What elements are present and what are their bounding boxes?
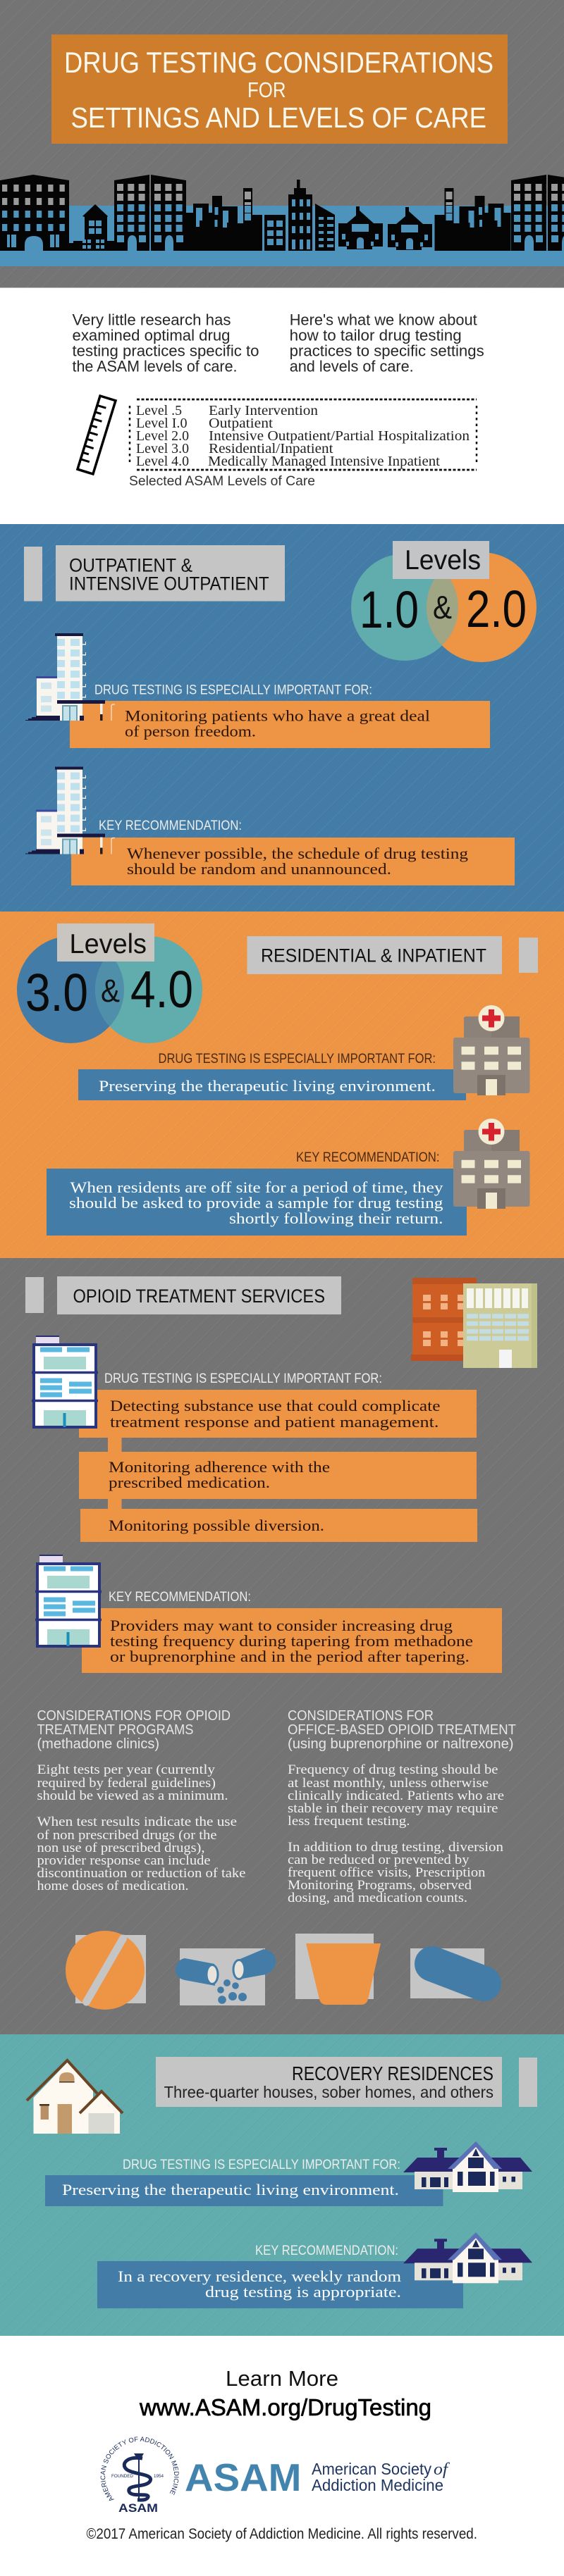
levels of care table: Intensive Outpatient/Partial Hospitalization [209, 429, 470, 444]
callout: key recommendation: In a recovery residence, weekly random [118, 2267, 402, 2285]
intro text left: examined optimal drug [72, 327, 230, 344]
levels venn 3.0 and 4.0: 4.0 [130, 960, 193, 1019]
levels of care table: Medically Managed Intensive Inpatient [208, 454, 441, 469]
callout: key recommendation: drug testing is appropriate. [205, 2283, 401, 2301]
header panel [0, 0, 564, 287]
levels venn 1.0 and 2.0: & [433, 589, 452, 626]
levels venn 1.0 and 2.0 [351, 541, 537, 662]
heading: residential: RESIDENTIAL & INPATIENT [261, 945, 486, 966]
levels of care table: Early Intervention [209, 404, 318, 418]
text block: office-based opioid treatment: In addition to drug testing, diversion [288, 1840, 504, 1855]
callout: drug testing important: Monitoring possible diversion. [109, 1517, 324, 1534]
text block: opioid treatment programs: should be viewed as a minimum. [37, 1788, 228, 1803]
callout: key recommendation: KEY RECOMMENDATION: [109, 1590, 251, 1605]
text block: opioid treatment programs: CONSIDERATIONS FOR OPIOID [37, 1707, 231, 1724]
icon: ASAM seal: AMERICAN SOCIETY OF ADDICTION MEDICINE [100, 2437, 179, 2501]
text block: opioid treatment programs: When test results indicate the use [37, 1815, 237, 1829]
callout: key recommendation: testing frequency during tapering from methadone [110, 1632, 473, 1650]
text block: office-based opioid treatment: dosing, and medication counts. [288, 1891, 467, 1905]
icon: office buildings [411, 1278, 537, 1368]
levels of care table: Level 3.0 [136, 442, 189, 456]
callout: drug testing important: DRUG TESTING IS ESPECIALLY IMPORTANT FOR: [158, 1052, 436, 1066]
callout: drug testing important: Detecting substance use that could complicate [110, 1397, 441, 1414]
text block: opioid treatment programs: Eight tests per year (currently [37, 1762, 216, 1777]
text block: office-based opioid treatment: less frequent testing. [288, 1814, 410, 1829]
heading: recovery residences [156, 2057, 537, 2107]
icon: cup [295, 1934, 381, 2005]
levels of care table: Level 4.0 [136, 454, 189, 469]
intro text left: Very little research has [72, 311, 231, 328]
levels of care table [130, 399, 477, 470]
levels venn 3.0 and 4.0: 3.0 [25, 963, 88, 1022]
intro text right: how to tailor drug testing [290, 327, 462, 344]
city skyline [0, 175, 564, 266]
levels venn 3.0 and 4.0: Levels [69, 929, 147, 959]
text block: office-based opioid treatment: stable in their recovery may require [288, 1801, 498, 1816]
logo wordmark: Addiction Medicine [312, 2476, 443, 2494]
callout: drug testing important: DRUG TESTING IS ESPECIALLY IMPORTANT FOR: [94, 683, 372, 698]
levels of care table: Level 2.0 [136, 429, 189, 444]
callout: drug testing important [78, 1005, 530, 1100]
intro text right: Here's what we know about [290, 311, 477, 328]
callout: drug testing important: Preserving the therapeutic living environment. [99, 1077, 436, 1095]
callout: drug testing important: DRUG TESTING IS ESPECIALLY IMPORTANT FOR: [104, 1371, 382, 1386]
callout: drug testing important: Monitoring adherence with the [109, 1458, 330, 1476]
heading: recovery residences: RECOVERY RESIDENCES [292, 2062, 494, 2084]
callout: key recommendation: should be asked to provide a sample for drug testing [69, 1194, 443, 1212]
callout: key recommendation: shortly following their return. [229, 1209, 443, 1227]
callout: key recommendation: When residents are off site for a period of time, they [70, 1178, 443, 1196]
intro panel [0, 287, 564, 524]
levels venn 3.0 and 4.0: & [101, 973, 120, 1009]
levels venn 1.0 and 2.0: Levels [405, 545, 481, 575]
callout: key recommendation: Providers may want to consider increasing drug [110, 1617, 453, 1634]
learn more link: www.ASAM.org/DrugTesting [139, 2394, 431, 2420]
callout: drug testing important [45, 2141, 532, 2206]
panel: footer [86, 2366, 477, 2542]
heading: outpatient [24, 545, 285, 602]
callout: drug testing important: prescribed medication. [109, 1474, 270, 1491]
heading: residential [247, 936, 538, 974]
text block: office-based opioid treatment: CONSIDERATIONS FOR [288, 1707, 434, 1724]
text block: opioid treatment programs: home doses of medication. [37, 1879, 189, 1893]
text block: opioid treatment programs: (methadone clinics) [37, 1736, 159, 1752]
text block: office-based opioid treatment: OFFICE-BASED OPIOID TREATMENT [288, 1722, 516, 1738]
text block: opioid treatment programs: required by federal guidelines) [37, 1776, 216, 1791]
callout: drug testing important: of person freedom. [125, 723, 256, 740]
logo wordmark: of [434, 2460, 450, 2479]
heading: outpatient: OUTPATIENT & [69, 555, 192, 576]
intro text left [72, 311, 259, 375]
text block: office-based opioid treatment: Monitoring Programs, observed [288, 1878, 472, 1893]
text block: opioid treatment programs: non use of prescribed drugs), [37, 1841, 204, 1855]
panel: residential [0, 911, 564, 1258]
learn more link [139, 2366, 431, 2420]
panel: opioid treatment [0, 1258, 564, 2034]
title box: SETTINGS AND LEVELS OF CARE [70, 101, 486, 134]
levels of care table: Level I.0 [136, 416, 188, 431]
text block: office-based opioid treatment: at least monthly, unless otherwise [288, 1776, 489, 1791]
levels of care table: Residential/Inpatient [209, 442, 333, 456]
icon: house [27, 2060, 123, 2134]
callout: drug testing important: Monitoring patients who have a great deal [125, 707, 430, 725]
title box [51, 35, 508, 144]
callout: drug testing important: treatment response and patient management. [110, 1413, 439, 1431]
logo wordmark: ASAM [185, 2456, 302, 2499]
callout: key recommendation: should be random and unannounced. [127, 860, 391, 878]
intro text left: the ASAM levels of care. [72, 358, 237, 375]
icon: ruler [78, 396, 116, 474]
callout: drug testing important [25, 633, 490, 748]
icon: ASAM seal: 1954 [154, 2474, 164, 2479]
text block: office-based opioid treatment: (using buprenorphine or naltrexone) [288, 1736, 513, 1752]
heading: opioid: OPIOID TREATMENT SERVICES [73, 1286, 325, 1307]
intro text right: practices to specific settings [290, 342, 484, 359]
levels venn 1.0 and 2.0: 2.0 [466, 580, 527, 638]
levels venn 3.0 and 4.0 [17, 923, 202, 1043]
logo wordmark: American Society [312, 2460, 431, 2478]
heading: outpatient: INTENSIVE OUTPATIENT [69, 573, 269, 595]
callout: key recommendation: KEY RECOMMENDATION: [296, 1150, 440, 1165]
callout: drug testing important [32, 1336, 477, 1542]
callout: key recommendation: Whenever possible, the schedule of drug testing [127, 845, 468, 862]
callout: drug testing important: DRUG TESTING IS ESPECIALLY IMPORTANT FOR: [123, 2158, 400, 2172]
levels of care table: Outpatient [209, 416, 274, 431]
text block: office-based opioid treatment: clinically indicated. Patients who are [288, 1788, 504, 1803]
logo wordmark [185, 2456, 450, 2499]
heading: recovery residences: Three-quarter houses, sober homes, and others [164, 2083, 494, 2101]
title box: FOR [247, 77, 286, 102]
intro text left: testing practices specific to [72, 342, 259, 359]
callout: key recommendation [25, 766, 515, 885]
levels venn 1.0 and 2.0: 1.0 [360, 580, 419, 639]
title box: DRUG TESTING CONSIDERATIONS [64, 46, 494, 79]
callout: key recommendation [97, 2232, 532, 2308]
text block: office-based opioid treatment [288, 1707, 516, 1905]
copyright: ©2017 American Society of Addiction Medicine. All rights reserved. [86, 2525, 477, 2542]
intro text right: and levels of care. [290, 358, 414, 375]
text block: opioid treatment programs: of non prescribed drugs (or the [37, 1828, 217, 1843]
intro text right [290, 311, 484, 375]
callout: key recommendation [35, 1555, 502, 1673]
panel: recovery residences [0, 2034, 564, 2336]
callout: key recommendation: KEY RECOMMENDATION: [99, 819, 242, 833]
text block: opioid treatment programs: discontinuation or reduction of take [37, 1866, 245, 1881]
text block: opioid treatment programs [37, 1707, 245, 1893]
table caption: Selected ASAM Levels of Care [129, 473, 315, 489]
icon: capsule [410, 1948, 484, 1998]
text block: office-based opioid treatment: frequent office visits, Prescription [288, 1865, 486, 1880]
callout: key recommendation [47, 1119, 530, 1236]
callout: drug testing important: Preserving the therapeutic living environment. [62, 2181, 399, 2198]
text block: office-based opioid treatment: can be reduced or prevented by [288, 1853, 470, 1867]
icon: ASAM seal: FOUNDED [111, 2474, 133, 2479]
callout: key recommendation: or buprenorphine and in the period after tapering. [110, 1648, 470, 1665]
text block: opioid treatment programs: provider response can include [37, 1853, 210, 1868]
text block: office-based opioid treatment: Frequency of drug testing should be [288, 1762, 498, 1777]
icon: ASAM seal: ASAM [118, 2501, 158, 2515]
panel: outpatient [0, 524, 564, 911]
icon: tablet [66, 1931, 146, 2010]
icon: open capsule [176, 1948, 276, 2005]
levels of care table: Level .5 [136, 404, 182, 418]
text block: opioid treatment programs: TREATMENT PROGRAMS [37, 1722, 193, 1738]
learn more link: Learn More [226, 2366, 338, 2391]
heading: opioid [25, 1276, 341, 1314]
callout: key recommendation: KEY RECOMMENDATION: [255, 2244, 398, 2258]
